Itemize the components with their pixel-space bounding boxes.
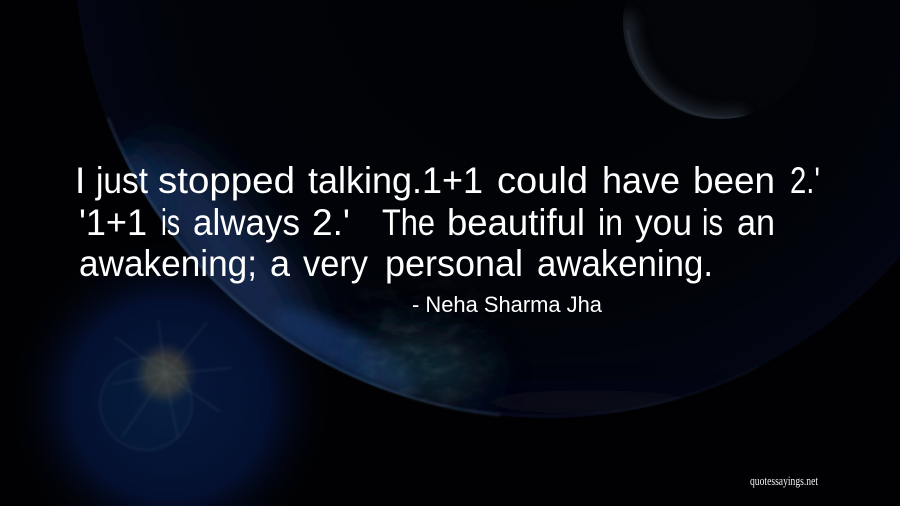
watermark: quotessayings.net [750, 473, 818, 488]
quote text: an [737, 202, 775, 243]
quote text: been [693, 160, 775, 201]
quote text: 2.' [790, 160, 820, 201]
blue glow around sun [0, 200, 360, 506]
quote text: could [497, 160, 588, 201]
quote text: is [702, 202, 723, 243]
quote text: just [95, 160, 149, 201]
quote text: I [75, 160, 85, 201]
quote text: a [270, 243, 290, 284]
attribution: - Neha Sharma Jha [412, 292, 603, 317]
quote text: awakening; [79, 243, 257, 284]
planet [74, 0, 900, 420]
quote text: stopped [158, 160, 295, 201]
quote text: always [193, 202, 300, 243]
moon [623, 9, 750, 119]
quote text: '1+1 [79, 202, 147, 243]
quote text: have [602, 160, 680, 201]
quote text: talking.1+1 [308, 160, 483, 201]
quote text: very [303, 243, 368, 284]
quote text: you [635, 202, 692, 243]
quote text: awakening. [537, 243, 713, 284]
quote text: is [161, 202, 180, 243]
sun with lens flare [100, 320, 232, 450]
quote text: personal [385, 243, 523, 284]
quote text [75, 160, 820, 284]
quote text: in [598, 202, 623, 243]
quote text: beautiful [447, 202, 585, 243]
quote text: 2.' [312, 202, 350, 243]
quote text: The [382, 202, 435, 243]
